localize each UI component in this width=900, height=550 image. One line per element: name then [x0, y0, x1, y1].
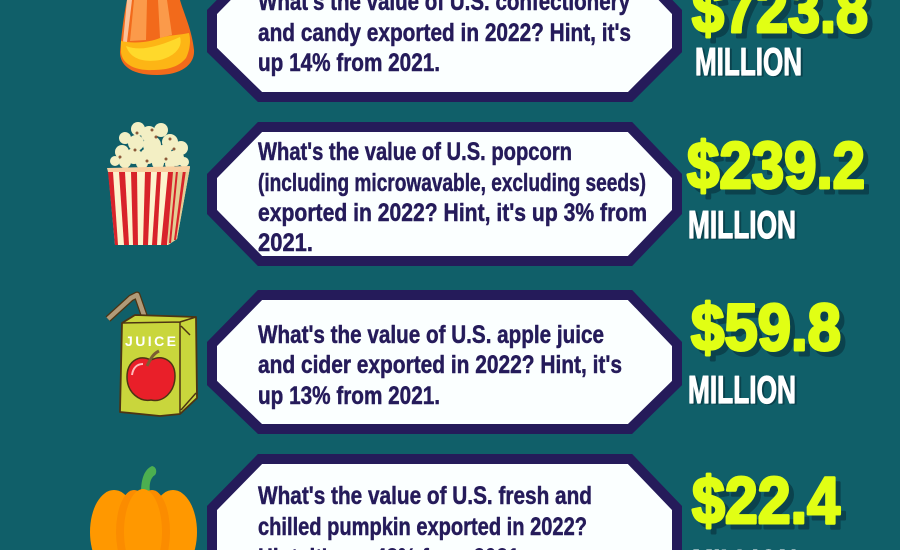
- panel: pumpkin question: [212, 459, 677, 550]
- text: popcorn question: What's the value of U.S. popcorn: [258, 138, 572, 166]
- text: candy question: [258, 0, 631, 77]
- value: apple juice: $59.8: [696, 295, 846, 369]
- value: apple juice: $59.8: [691, 290, 841, 364]
- icon: candy corn: [120, 0, 194, 75]
- panel: popcorn question: [212, 127, 677, 261]
- value: popcorn: MILLION: [690, 205, 798, 248]
- panel: apple juice question: [212, 295, 677, 429]
- text: pumpkin question: chilled pumpkin exported in 2022?: [258, 513, 587, 541]
- value: apple juice: MILLION: [688, 369, 796, 412]
- value: popcorn: $239.2: [692, 133, 870, 207]
- value: candy: [692, 0, 873, 85]
- value: apple juice: MILLION: [690, 370, 798, 413]
- text: popcorn question: exported in 2022? Hint, it's up 3% from: [258, 199, 647, 227]
- text: popcorn question: 2021.: [258, 229, 313, 257]
- text: candy question: and candy exported in 2022? Hint, it's: [258, 19, 631, 47]
- text: popcorn question: (including microwavable, excluding seeds): [258, 169, 646, 197]
- text: apple juice question: What's the value of U.S. apple juice: [258, 321, 604, 349]
- text: candy question: up 14% from 2021.: [258, 49, 440, 77]
- value: apple juice: [688, 290, 846, 413]
- value: popcorn: MILLION: [688, 204, 796, 247]
- text: apple juice question: and cider exported in 2022? Hint, it's: [258, 351, 622, 379]
- text: pumpkin question: What's the value of U.S. fresh and: [258, 482, 592, 510]
- text: pumpkin question: [258, 482, 592, 550]
- text: apple juice question: [258, 321, 622, 410]
- value: popcorn: $239.2: [687, 128, 865, 202]
- value: pumpkin: $22.4: [697, 468, 845, 542]
- text: apple juice question: up 13% from 2021.: [258, 382, 440, 410]
- value: candy: MILLION: [697, 42, 804, 85]
- icon: popcorn: [107, 122, 190, 245]
- value: candy: MILLION: [695, 41, 802, 84]
- text: popcorn question: [258, 138, 647, 257]
- value: pumpkin: $22.4: [692, 463, 840, 537]
- icon: pumpkin: [90, 466, 197, 550]
- panel: candy question: [212, 0, 677, 97]
- value: popcorn: [687, 128, 870, 248]
- icon: juice box: [108, 295, 197, 416]
- icon: juice box: JUICE: [125, 333, 176, 349]
